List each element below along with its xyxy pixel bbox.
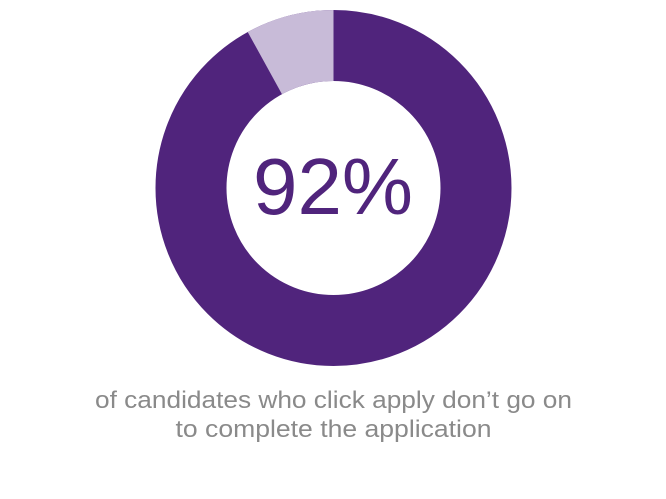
big number 92%: 92% bbox=[253, 142, 413, 231]
caption bbox=[95, 387, 572, 443]
donut: 92% segment bbox=[191, 46, 476, 330]
caption: to complete the application bbox=[176, 416, 492, 443]
donut chart bbox=[191, 10, 476, 331]
caption: of candidates who click apply don’t go on bbox=[95, 387, 572, 414]
donut: 8% remaining segment bbox=[248, 10, 334, 94]
